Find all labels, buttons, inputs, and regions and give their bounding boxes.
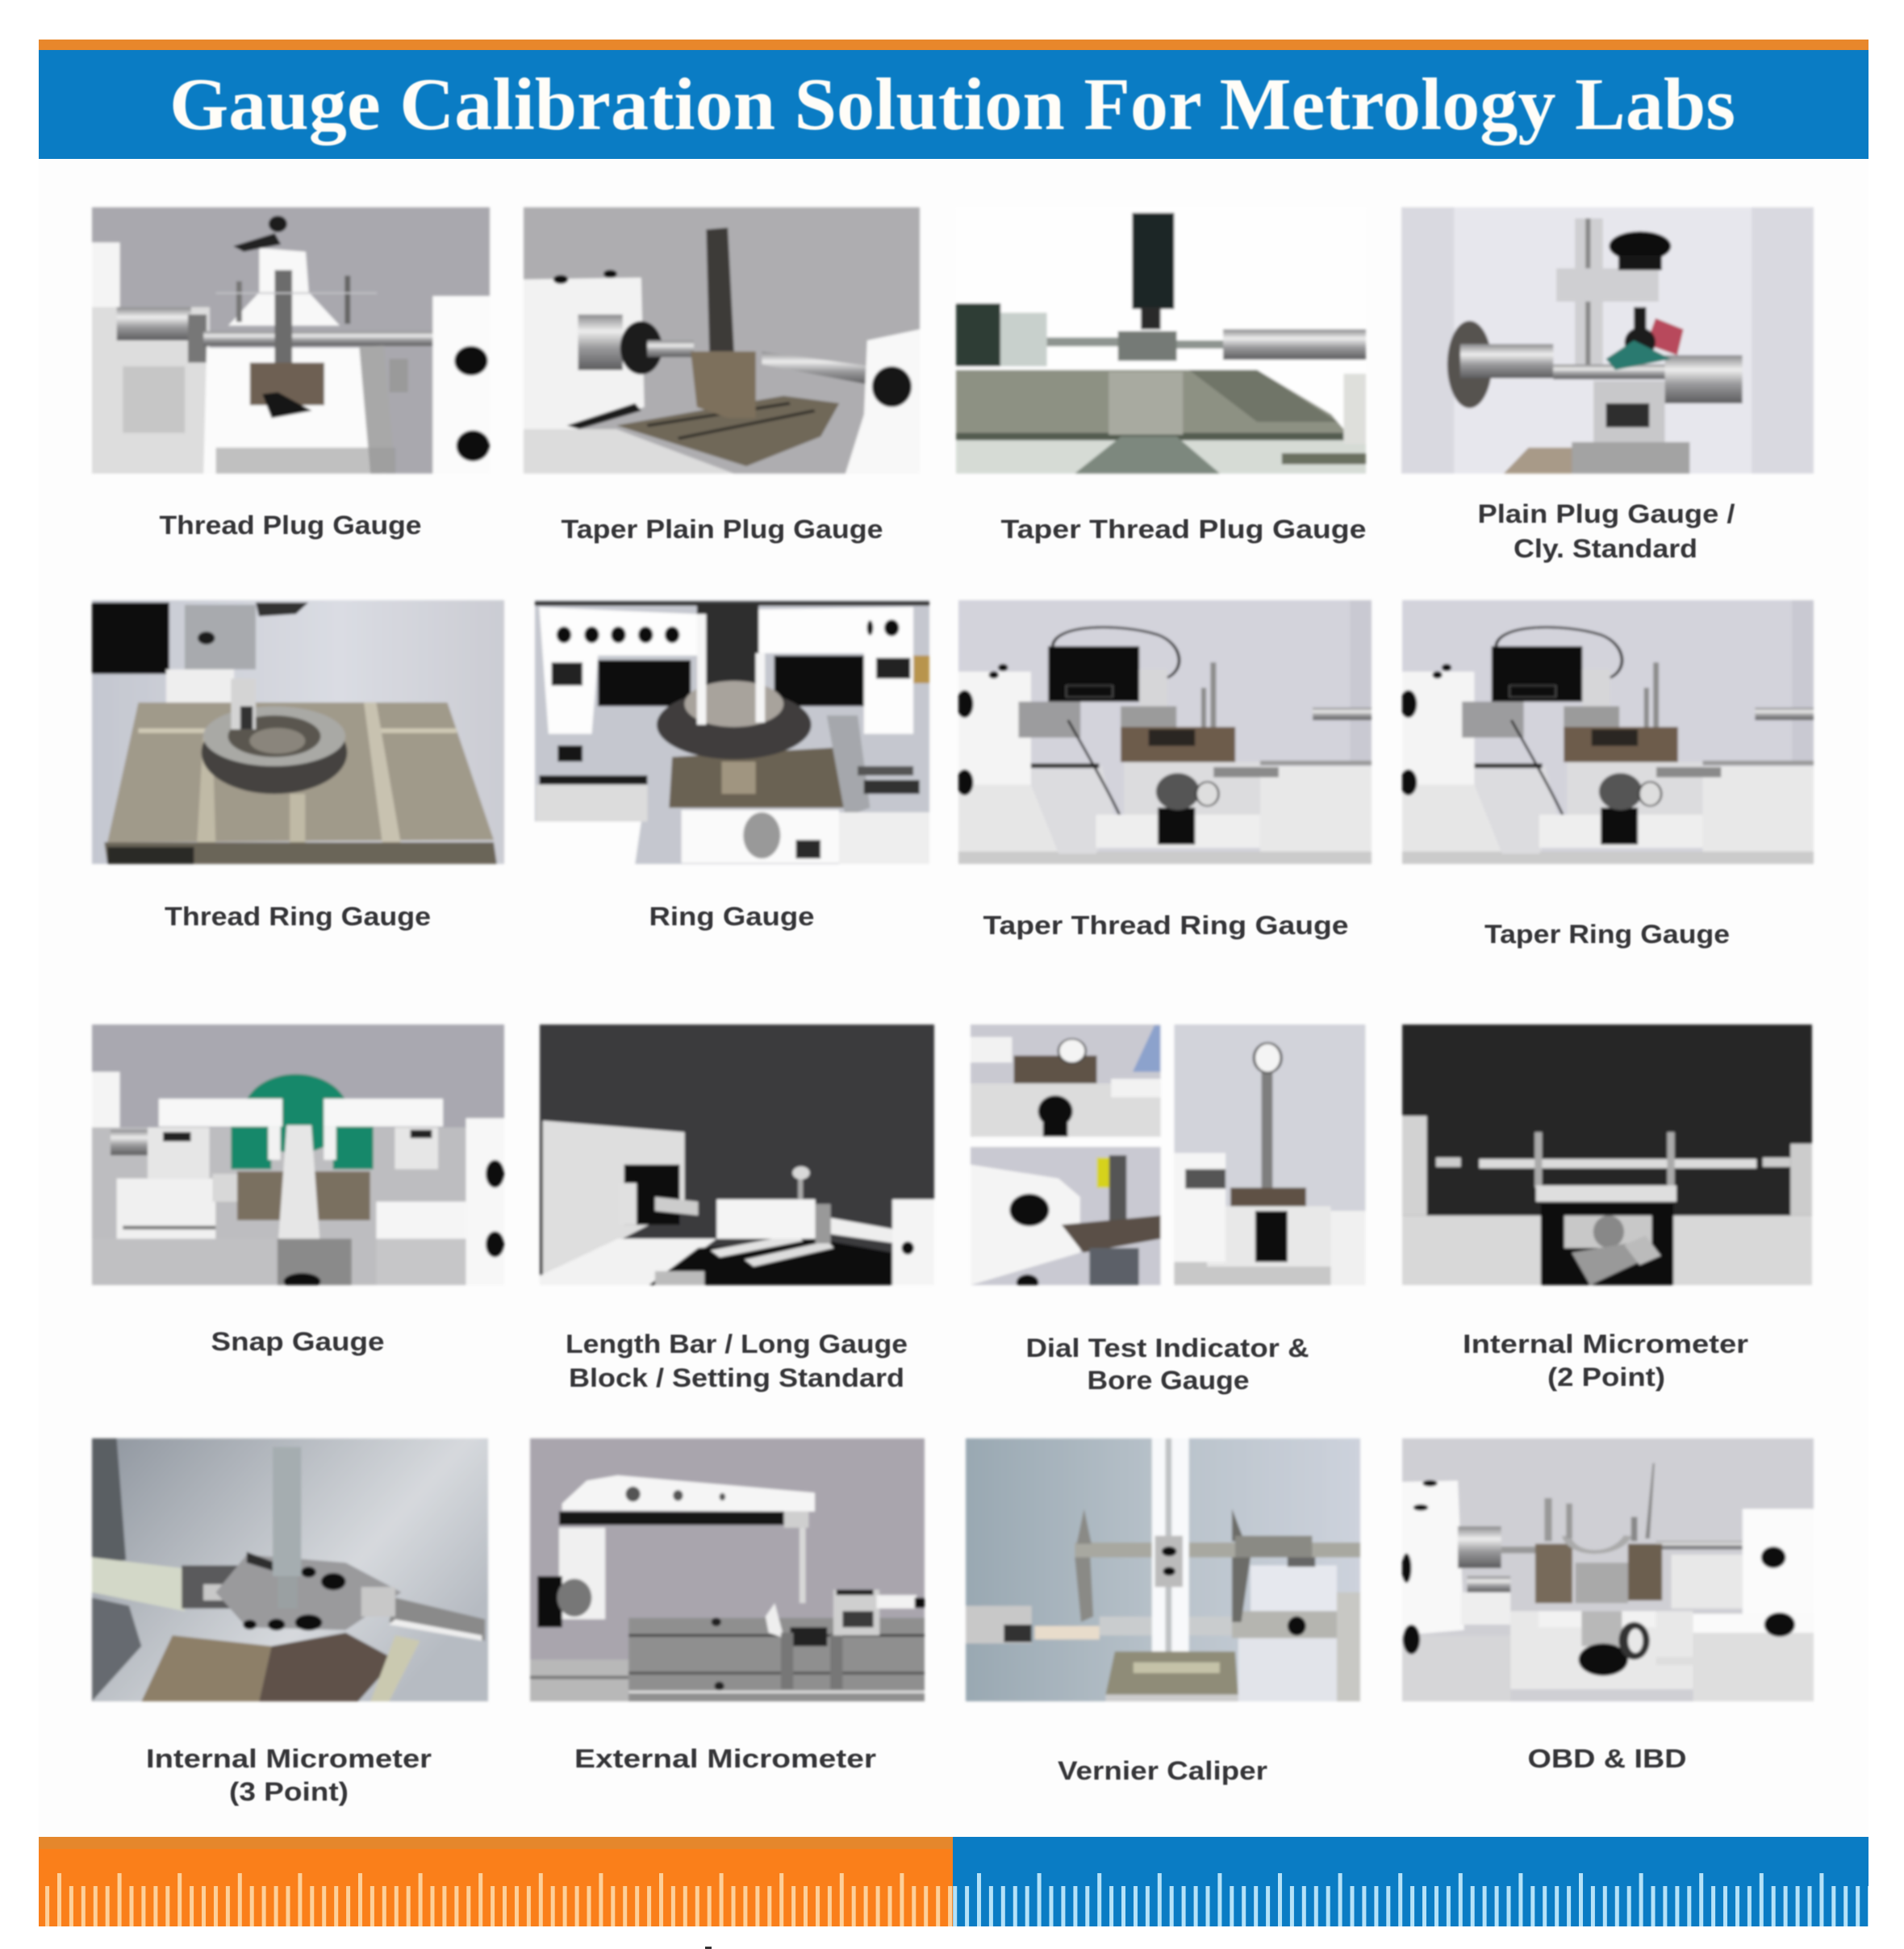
panel: taper thread plug gauge xyxy=(956,207,1367,544)
title banner xyxy=(39,40,1869,159)
panel: plain plug gauge / cly. standard xyxy=(1401,207,1814,563)
photo: obd and ibd xyxy=(1401,1438,1814,1701)
panel: ring gauge xyxy=(535,600,929,931)
label: Internal Micrometer xyxy=(1463,1329,1748,1358)
label: External Micrometer xyxy=(574,1744,876,1773)
photo: thread ring gauge xyxy=(92,600,504,864)
panel: dial test indicator & bore gauge xyxy=(971,1025,1367,1395)
panel: thread ring gauge xyxy=(92,600,504,931)
label: Length Bar / Long Gauge xyxy=(566,1329,908,1358)
label line 2: (3 Point) xyxy=(229,1777,349,1806)
photo: plain plug gauge xyxy=(1401,207,1814,474)
label line 2: Cly. Standard xyxy=(1514,534,1697,563)
panel: snap gauge xyxy=(92,1025,504,1356)
photo: length bar xyxy=(540,1025,934,1285)
panel: taper ring gauge xyxy=(1400,600,1814,949)
photo: internal micrometer 3 point xyxy=(92,1438,488,1701)
photo: snap gauge xyxy=(92,1025,504,1290)
label: Taper Thread Ring Gauge xyxy=(983,911,1349,940)
label: Taper Thread Plug Gauge xyxy=(1000,515,1367,544)
photo: taper ring gauge xyxy=(1400,600,1814,864)
photo: ring gauge xyxy=(535,600,929,864)
panel: obd & ibd xyxy=(1401,1438,1814,1773)
label: Thread Plug Gauge xyxy=(160,511,421,540)
label: Vernier Caliper xyxy=(1058,1756,1267,1785)
blue banner band xyxy=(39,50,1869,159)
panel: vernier caliper xyxy=(966,1438,1360,1785)
photo: internal micrometer 2 point xyxy=(1402,1025,1812,1285)
label: Ring Gauge xyxy=(649,902,815,931)
small mark at bottom edge xyxy=(705,1947,712,1949)
panel: thread plug gauge xyxy=(92,207,490,540)
label line 2: Block / Setting Standard xyxy=(569,1363,904,1392)
photo: taper thread plug gauge xyxy=(956,207,1366,474)
label line 2: (2 Point) xyxy=(1547,1363,1665,1392)
label line 2: Bore Gauge xyxy=(1088,1366,1249,1395)
photo: taper plain plug gauge xyxy=(524,207,920,474)
orange ruler half xyxy=(39,1837,953,1926)
photo: vernier caliper xyxy=(966,1438,1360,1701)
panel: external micrometer xyxy=(530,1438,925,1773)
label: Snap Gauge xyxy=(211,1327,384,1356)
panel: internal micrometer 3 point xyxy=(92,1438,488,1806)
label: Dial Test Indicator & xyxy=(1026,1333,1309,1363)
label: Internal Micrometer xyxy=(146,1744,432,1773)
title: Gauge Calibration Solution For Metrology Labs xyxy=(169,63,1735,145)
label: Taper Ring Gauge xyxy=(1484,920,1730,949)
photo: taper thread ring gauge xyxy=(956,600,1372,864)
label: Taper Plain Plug Gauge xyxy=(562,515,883,544)
blue ruler half xyxy=(953,1837,1869,1926)
photo: dial indicator composite xyxy=(971,1025,1367,1291)
orange top stripe xyxy=(39,40,1869,50)
label: OBD & IBD xyxy=(1528,1744,1686,1773)
photo: external micrometer xyxy=(530,1438,925,1701)
label: Plain Plug Gauge / xyxy=(1478,499,1735,528)
panel: taper thread ring gauge xyxy=(956,600,1372,940)
panel: taper plain plug gauge xyxy=(524,207,920,544)
footer ruler band xyxy=(39,1837,1869,1926)
label: Thread Ring Gauge xyxy=(165,902,431,931)
photo: thread plug gauge xyxy=(92,207,490,474)
panel: length bar / long gauge block / setting standard xyxy=(540,1025,934,1392)
panel: internal micrometer 2 point xyxy=(1402,1025,1812,1392)
